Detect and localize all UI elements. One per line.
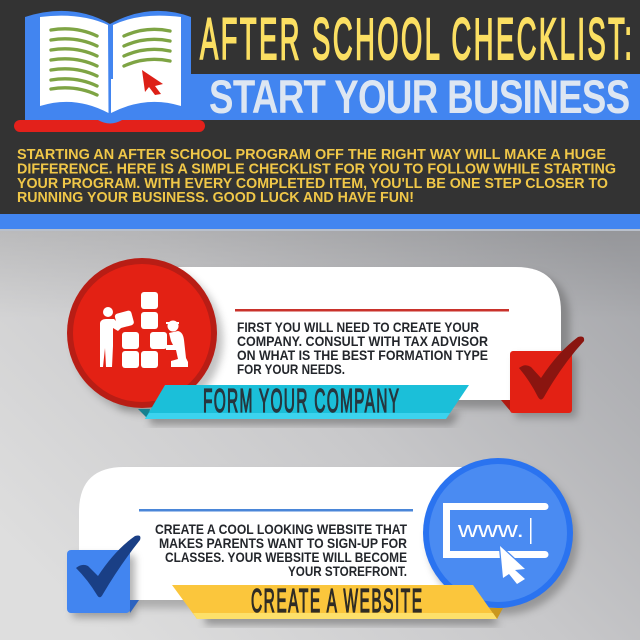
- intro text: RUNNING YOUR BUSINESS. GOOD LUCK AND HAVE FUN!: [17, 189, 414, 206]
- ribbon: create a website: CREATE A WEBSITE: [251, 584, 422, 620]
- circle icon: builders and blocks: [67, 258, 223, 415]
- description text: CREATE A COOL LOOKING WEBSITE THAT: [155, 521, 407, 537]
- circle icon: www cursor: www.: [457, 517, 524, 542]
- checkbox: red: [501, 336, 584, 418]
- description text: [155, 521, 407, 579]
- ribbon: form your company: FORM YOUR COMPANY: [203, 384, 399, 420]
- checkbox: blue: [67, 536, 140, 618]
- ribbon: form your company: [138, 384, 469, 425]
- subtitle banner: [191, 74, 640, 120]
- divider: blue rule: [139, 509, 413, 512]
- description text: ON WHAT IS THE BEST FORMATION TYPE: [237, 347, 488, 363]
- intro text: [17, 146, 616, 206]
- header panel: [0, 0, 640, 231]
- description text: YOUR STOREFRONT.: [288, 563, 407, 579]
- ribbon: create a website: [172, 584, 503, 625]
- description text: MAKES PARENTS WANT TO SIGN-UP FOR: [159, 535, 407, 551]
- panel: create a website: [67, 458, 578, 625]
- panel: form your company: [67, 258, 584, 425]
- intro text: STARTING AN AFTER SCHOOL PROGRAM OFF THE RIGHT WAY WILL MAKE A HUGE: [17, 146, 606, 163]
- icon: open book with cursor: [14, 11, 205, 132]
- title: AFTER SCHOOL CHECKLIST:: [200, 7, 632, 72]
- circle icon: www cursor: [423, 458, 578, 615]
- description text: CLASSES. YOUR WEBSITE WILL BECOME: [165, 549, 407, 565]
- description text: COMPANY. CONSULT WITH TAX ADVISOR: [237, 333, 488, 349]
- intro text: DIFFERENCE. HERE IS A SIMPLE CHECKLIST FOR YOU TO FOLLOW WHILE STARTING: [17, 160, 616, 178]
- divider: red rule: [235, 309, 509, 312]
- background: [0, 229, 640, 640]
- intro text: YOUR PROGRAM. WITH EVERY COMPLETED ITEM, YOU'LL BE ONE STEP CLOSER TO: [17, 175, 608, 192]
- description text: FOR YOUR NEEDS.: [237, 361, 345, 377]
- description text: FIRST YOU WILL NEED TO CREATE YOUR: [237, 319, 479, 335]
- subtitle: START YOUR BUSINESS: [209, 71, 630, 123]
- description text: [237, 319, 488, 377]
